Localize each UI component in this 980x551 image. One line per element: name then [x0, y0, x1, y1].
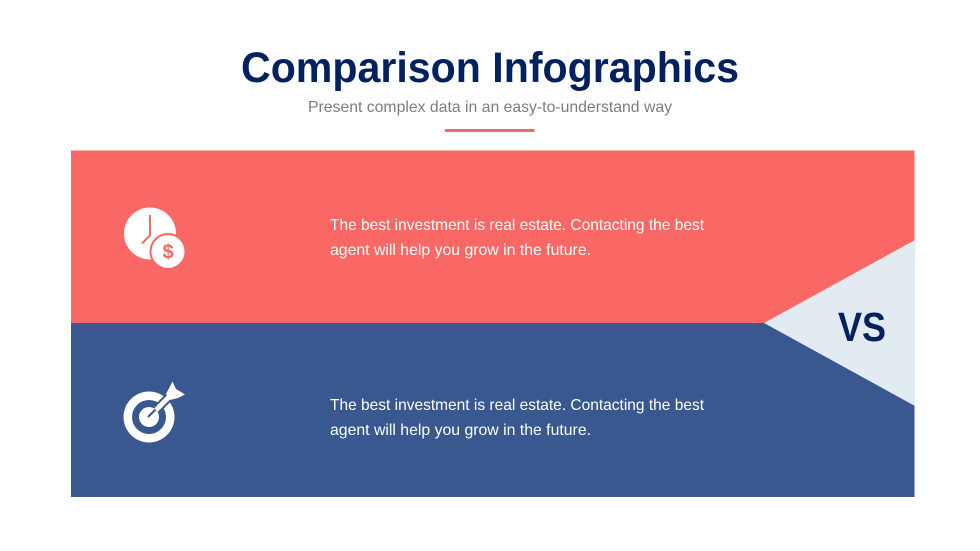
text block: top option: agent will help you grow in the future. [330, 242, 591, 259]
versus badge: VS [838, 304, 886, 350]
versus badge [764, 240, 915, 406]
panel: top option [71, 150, 914, 323]
text block: top option [330, 217, 705, 259]
icon: target with dart [124, 382, 185, 442]
icon: clock with dollar coin [124, 208, 186, 270]
title underline [445, 129, 534, 132]
icon: clock with dollar coin: $ [162, 242, 174, 264]
text block: top option: The best investment is real estate. Contacting the best [330, 217, 705, 234]
text block: bottom option [330, 397, 705, 439]
text block: bottom option: The best investment is real estate. Contacting the best [330, 397, 705, 414]
panel: bottom option [71, 323, 914, 497]
subtitle: Present complex data in an easy-to-understand way [308, 99, 672, 116]
title: Comparison Infographics [241, 44, 739, 92]
text block: bottom option: agent will help you grow in the future. [330, 422, 591, 439]
